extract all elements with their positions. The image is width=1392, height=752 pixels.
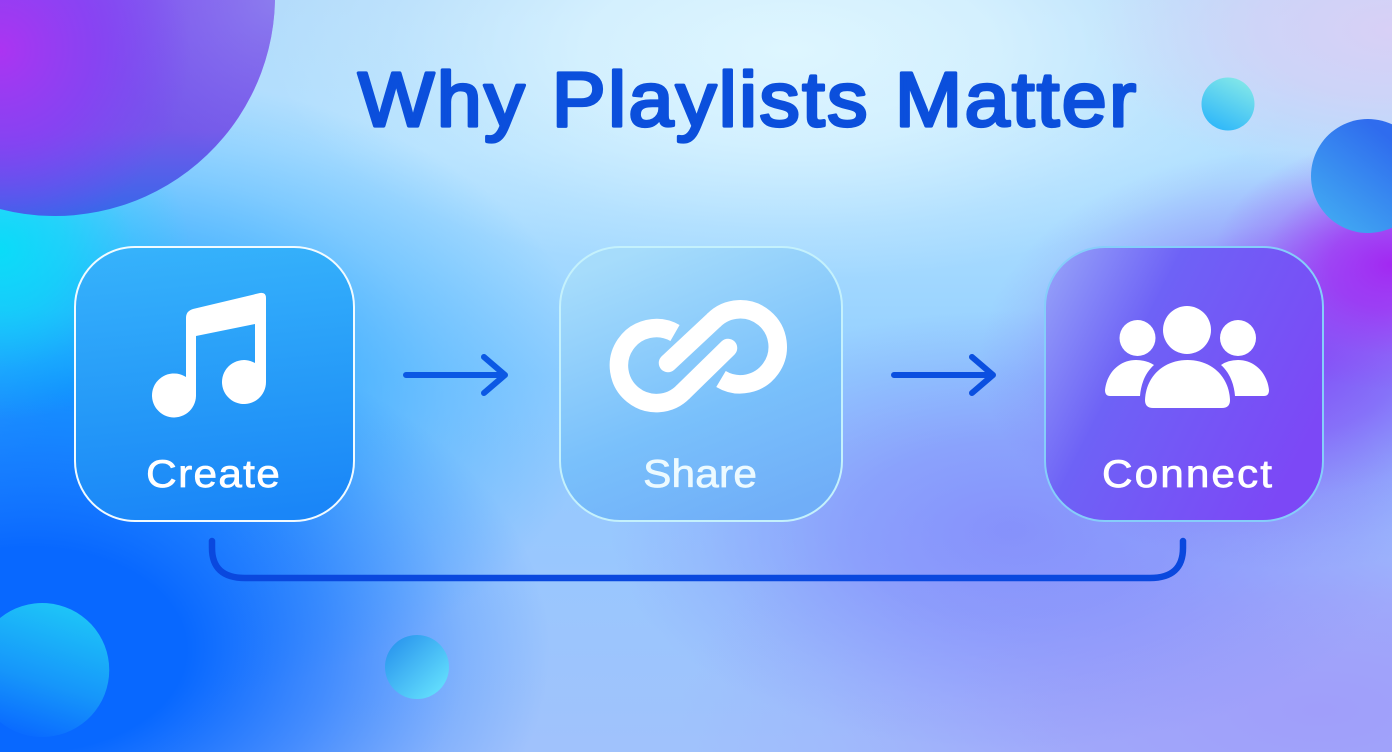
arrow: share to connect [894, 357, 993, 393]
decorative circle: right edge [1311, 119, 1392, 233]
panel: connect [1045, 247, 1323, 521]
title: Why Playlists Matter [358, 57, 1136, 143]
icon: music note [152, 293, 266, 417]
panel: create [75, 247, 354, 521]
label: share: Share [643, 452, 757, 496]
panel: share [560, 247, 842, 521]
feedback bracket connector [212, 541, 1183, 578]
decorative circle: small top right [1202, 78, 1254, 130]
arrow: create to share [406, 357, 505, 393]
decorative circle: large top left [0, 0, 275, 216]
decorative circle: bottom centre [385, 635, 449, 699]
decorative circle: bottom left [0, 603, 109, 737]
label: create: Create [146, 452, 280, 496]
icon: link [619, 309, 778, 403]
label: connect: Connect [1102, 452, 1272, 496]
icon: people [1105, 306, 1269, 408]
